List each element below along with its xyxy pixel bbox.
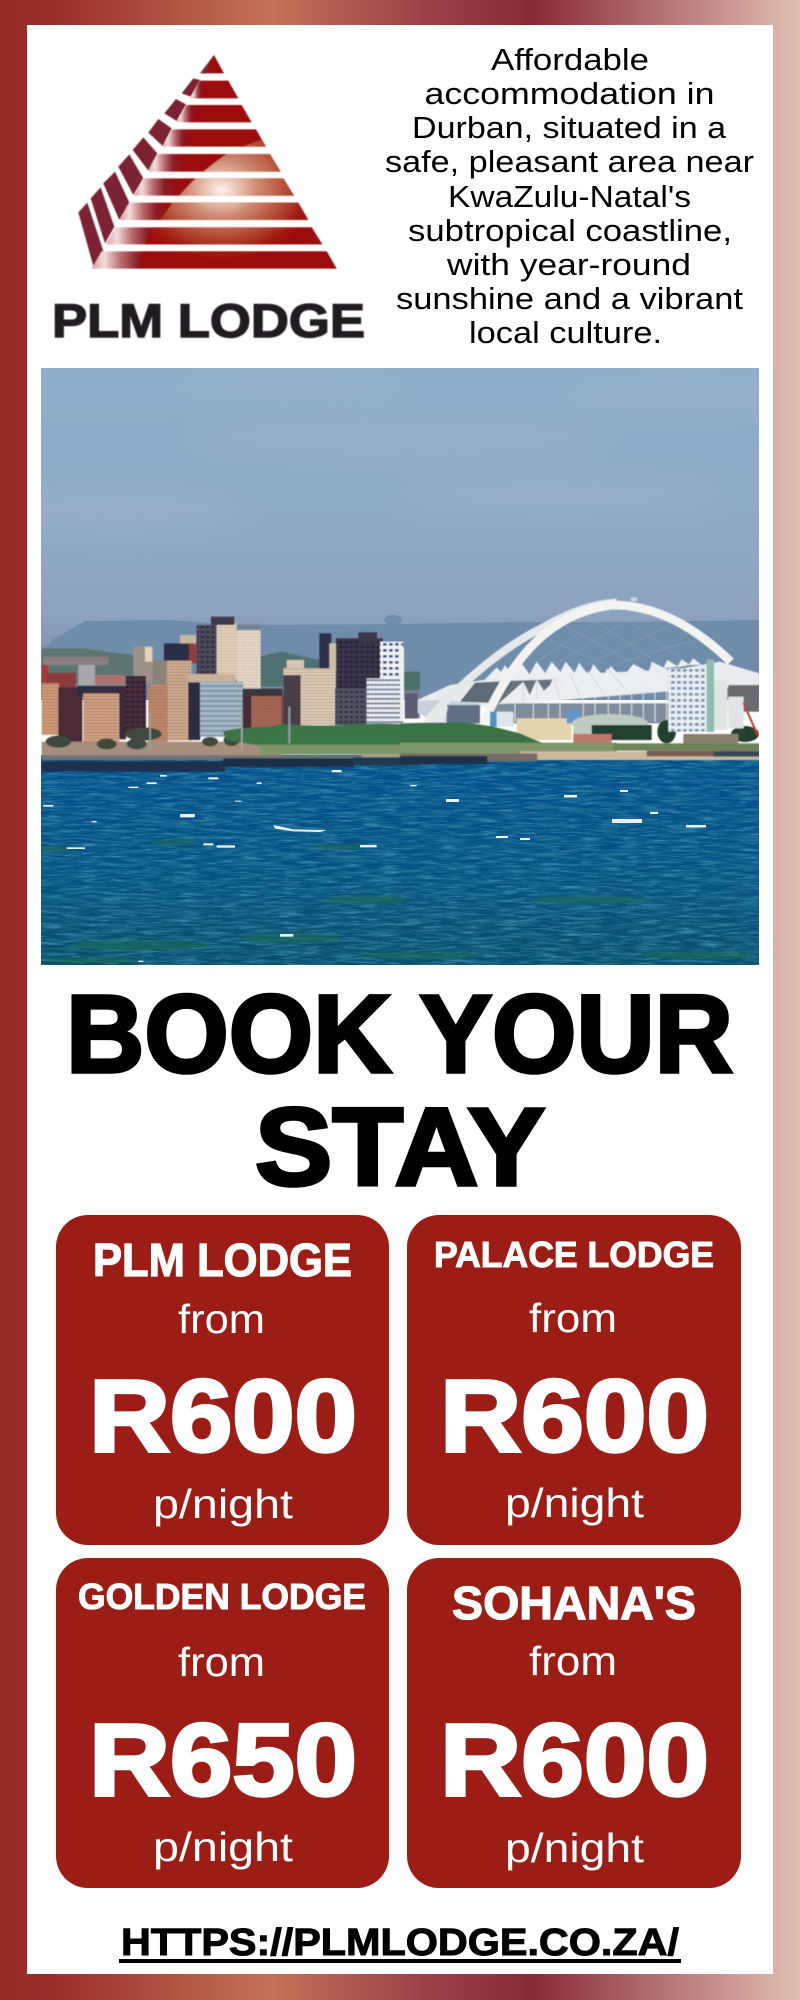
- sky: [41, 368, 759, 658]
- card: PLM Lodge: [56, 1215, 389, 1545]
- foreground buildings: [496, 711, 514, 727]
- website link: HTTPS://PLMLODGE.CO.ZA/: [121, 1922, 679, 1964]
- text block: description: Durban, situated in a: [412, 110, 727, 145]
- text block: description: Affordable: [491, 42, 649, 77]
- promenade ground and palms: [42, 742, 282, 757]
- lodge name: SOHANA'S: [452, 1577, 696, 1629]
- text block: description: sunshine and a vibrant: [396, 281, 743, 316]
- card: Golden Lodge: [56, 1558, 389, 1888]
- icon: striped pyramid: [78, 55, 340, 270]
- wave flecks: [43, 769, 417, 962]
- pier: [42, 755, 362, 760]
- crane: [743, 703, 758, 737]
- from label: from: [529, 1638, 617, 1684]
- price: R600: [89, 1359, 357, 1473]
- price: R600: [440, 1703, 709, 1817]
- left tower continuation: [400, 648, 404, 720]
- from label: from: [529, 1295, 617, 1341]
- lodge name: PLM LODGE: [93, 1234, 352, 1286]
- cream block: [283, 668, 336, 725]
- logo: PLM Lodge: [52, 55, 365, 347]
- brown block: [250, 696, 282, 728]
- text block: description: accommodation in: [424, 76, 714, 111]
- glass block: [188, 680, 200, 740]
- photo: Durban skyline and stadium over the sea: [41, 368, 759, 965]
- lodge name: PALACE LODGE: [434, 1234, 714, 1275]
- stand interior: [460, 681, 515, 703]
- tall tower: [197, 625, 217, 682]
- ground: [400, 723, 543, 744]
- price: R650: [89, 1703, 357, 1817]
- heading: BOOK YOUR: [66, 973, 733, 1096]
- lamp posts: [288, 707, 290, 743]
- text block: description: KwaZulu-Natal's: [448, 179, 691, 214]
- heading: [66, 973, 733, 1209]
- per night label: p/night: [505, 1825, 645, 1871]
- sea: [35, 755, 759, 965]
- dark tower: [319, 633, 331, 668]
- heading: STAY: [255, 1086, 545, 1209]
- arch: [427, 603, 617, 721]
- trees: [592, 720, 759, 743]
- hotel: [668, 668, 709, 732]
- white tower: [380, 642, 403, 682]
- from label: from: [178, 1296, 265, 1342]
- per night label: p/night: [505, 1480, 645, 1526]
- roof peaks: [485, 658, 702, 704]
- per night label: p/night: [153, 1481, 294, 1527]
- card: Palace Lodge: [407, 1215, 741, 1545]
- price: R600: [440, 1359, 709, 1473]
- text block: description: local culture.: [469, 315, 662, 350]
- text block: description: with year-round: [446, 247, 691, 282]
- facade: [416, 700, 480, 722]
- roof: [416, 662, 759, 715]
- city buildings: [42, 617, 420, 772]
- per night label: p/night: [153, 1824, 294, 1870]
- card: Sohana's: [407, 1558, 741, 1888]
- lodge name: GOLDEN LODGE: [78, 1576, 366, 1617]
- logo wordmark: PLM LODGE: [52, 294, 365, 347]
- distant hills: [41, 620, 759, 700]
- green dunes: [223, 723, 420, 746]
- text block: description: subtropical coastline,: [408, 213, 732, 248]
- text block: description: [385, 42, 754, 350]
- from label: from: [178, 1639, 265, 1685]
- text block: description: safe, pleasant area near: [385, 144, 754, 179]
- stadium: [400, 597, 760, 764]
- arch cable mesh: [541, 622, 693, 665]
